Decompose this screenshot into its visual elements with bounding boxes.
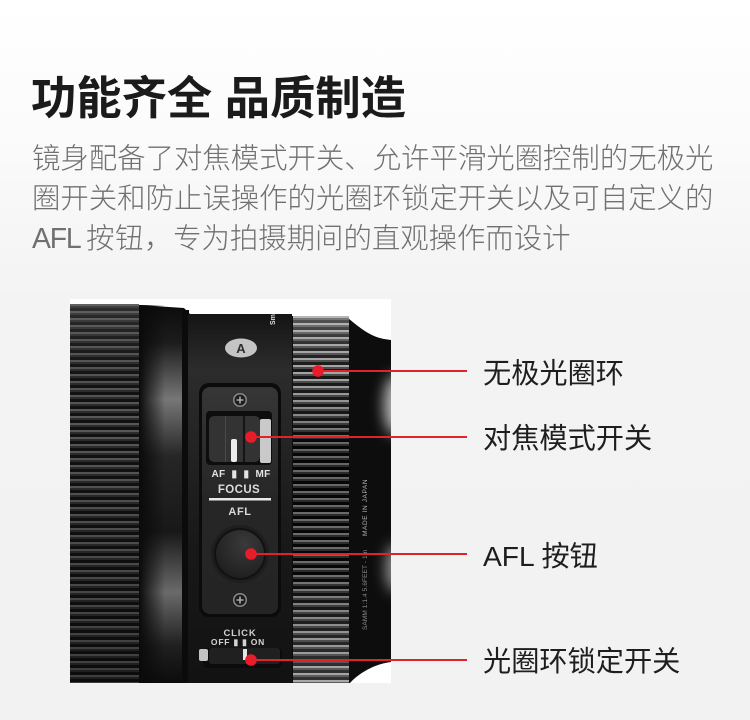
lens body — [188, 314, 292, 683]
AFL label: AFL — [228, 506, 252, 518]
callout: focus mode switch — [245, 431, 467, 443]
off on label: OFF ▮ ▮ ON — [211, 637, 265, 647]
label: focus mode switch: 对焦模式开关 — [483, 422, 652, 454]
lens illustration — [70, 299, 467, 683]
AF MF label: AF ▮ ▮ MF — [211, 469, 271, 480]
callout: AFL button — [245, 548, 467, 560]
white corner cutout — [350, 662, 391, 683]
top screw — [233, 393, 247, 407]
A badge — [225, 338, 257, 358]
A badge: A — [236, 341, 246, 356]
left ribbed focus ring — [70, 304, 139, 683]
vertical lens text: MADE IN JAPAN — [362, 479, 369, 536]
control panel — [199, 383, 281, 617]
label: AFL button: AFL 按钮 — [483, 540, 598, 572]
label: aperture ring: 无极光圈环 — [483, 357, 624, 389]
description text: 镜身配备了对焦模式开关、允许平滑光圈控制的无极光 — [32, 143, 713, 175]
callout: aperture ring — [312, 365, 467, 377]
AFL button — [214, 528, 266, 580]
FOCUS label: FOCUS — [218, 484, 260, 496]
description text: 圈开关和防止误操作的光圈环锁定开关以及可自定义的 — [32, 183, 713, 215]
lens rear section — [292, 316, 391, 683]
label: lock switch: 光圈环锁定开关 — [483, 645, 680, 677]
description text — [32, 143, 713, 255]
vertical lens text — [270, 314, 369, 630]
photo background — [70, 299, 391, 683]
click label: CLICK — [223, 628, 257, 639]
barrel segment — [139, 305, 190, 683]
click switch — [199, 648, 280, 664]
vertical lens text: Sm — [270, 314, 277, 325]
bottom screw — [233, 593, 247, 607]
title: 功能齐全 品质制造 — [31, 73, 406, 124]
aperture ring ribs — [293, 316, 349, 683]
vertical lens text: SAMM 1:1.4 5.6FEET - 1m — [362, 550, 369, 630]
focus mode switch — [206, 411, 272, 465]
description text: AFL 按钮，专为拍摄期间的直观操作而设计 — [32, 223, 571, 255]
callout: lock switch — [245, 654, 467, 666]
